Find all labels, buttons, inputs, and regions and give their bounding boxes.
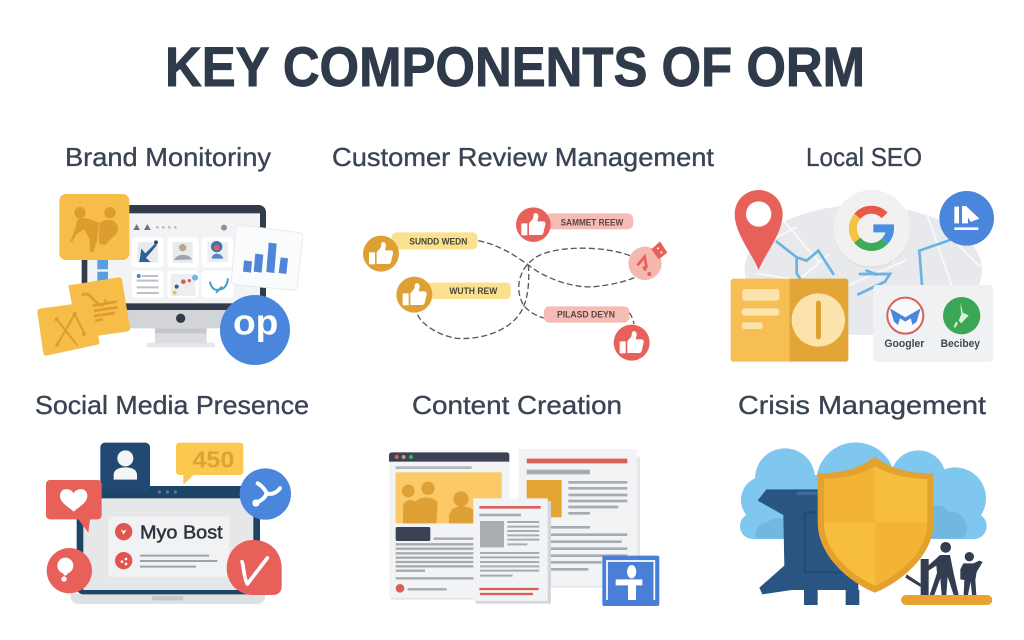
dashboard tiles [132, 237, 233, 298]
panel: social media illustration [46, 443, 291, 604]
icon: alert badge [628, 241, 667, 280]
post content [115, 521, 224, 569]
people on platform [901, 542, 992, 605]
icon: blue share circle [240, 468, 291, 520]
document: left browser page [389, 452, 509, 600]
review: pilasd deyn: PILASD DEYN [557, 309, 615, 319]
review: sundd wedn [363, 232, 477, 272]
icon: google circle [833, 190, 910, 268]
icon: yellow speech bubble [176, 443, 243, 485]
cloud background [740, 442, 987, 539]
review: wuth rew: WUTH REW [449, 286, 498, 296]
icon: blue circle badge [939, 191, 994, 246]
review: wuth rew [396, 277, 511, 313]
document: right article [518, 449, 640, 588]
heading: social media presence: Social Media Presence [35, 390, 309, 420]
post content: Myo Bost [140, 521, 224, 542]
listing card: Googler [884, 338, 925, 350]
icon: laptop [71, 486, 265, 604]
icon: profile card [100, 443, 150, 492]
icon: heart bubble [46, 480, 102, 533]
panel: brand monitoring illustration [37, 194, 303, 365]
icon: blue circle logo [220, 295, 290, 365]
panel: customer review management illustration [363, 207, 667, 361]
heading: local seo: Local SEO [806, 142, 922, 172]
heading: crisis management: Crisis Management [738, 390, 987, 420]
heading: brand monitoring: Brand Monitoriny [65, 142, 271, 172]
heading: content creation: Content Creation [412, 390, 622, 420]
document: center page [473, 498, 551, 604]
icon: yellow speech bubble: 450 [192, 447, 234, 473]
panel: content creation illustration [389, 449, 659, 606]
title: KEY COMPONENTS OF ORM [165, 35, 865, 98]
icon: green logo [943, 297, 980, 334]
dashed connectors [417, 241, 647, 339]
panel: crisis management illustration [740, 442, 992, 605]
map globe [745, 205, 982, 335]
hero image [396, 472, 502, 523]
panel: local seo illustration [731, 190, 994, 362]
icon: red bulb circle [47, 548, 92, 593]
review: sammet reew [516, 207, 633, 242]
icon: red ring logo [887, 298, 923, 334]
review: sundd wedn: SUNDD WEDN [409, 236, 467, 246]
icon: business card [731, 279, 848, 362]
icon: shield [818, 457, 934, 593]
listing card: Becibey [941, 338, 981, 350]
review: pilasd deyn [544, 306, 650, 361]
icon: bar chart card [231, 225, 303, 290]
icon: anvil [758, 489, 859, 605]
route lines [777, 240, 950, 294]
icon: red v badge [227, 540, 282, 595]
icon: blue person tile [602, 556, 659, 606]
listing card [873, 285, 993, 362]
icon: yellow card with people [59, 194, 129, 260]
icon: desktop monitor [82, 205, 266, 347]
icon: blue circle logo: op [233, 301, 278, 342]
review: sammet reew: SAMMET REEW [561, 218, 624, 228]
icon: yellow note cards [37, 277, 130, 356]
heading: customer review management: Customer Review Management [332, 142, 715, 172]
icon: location pin [735, 190, 783, 270]
